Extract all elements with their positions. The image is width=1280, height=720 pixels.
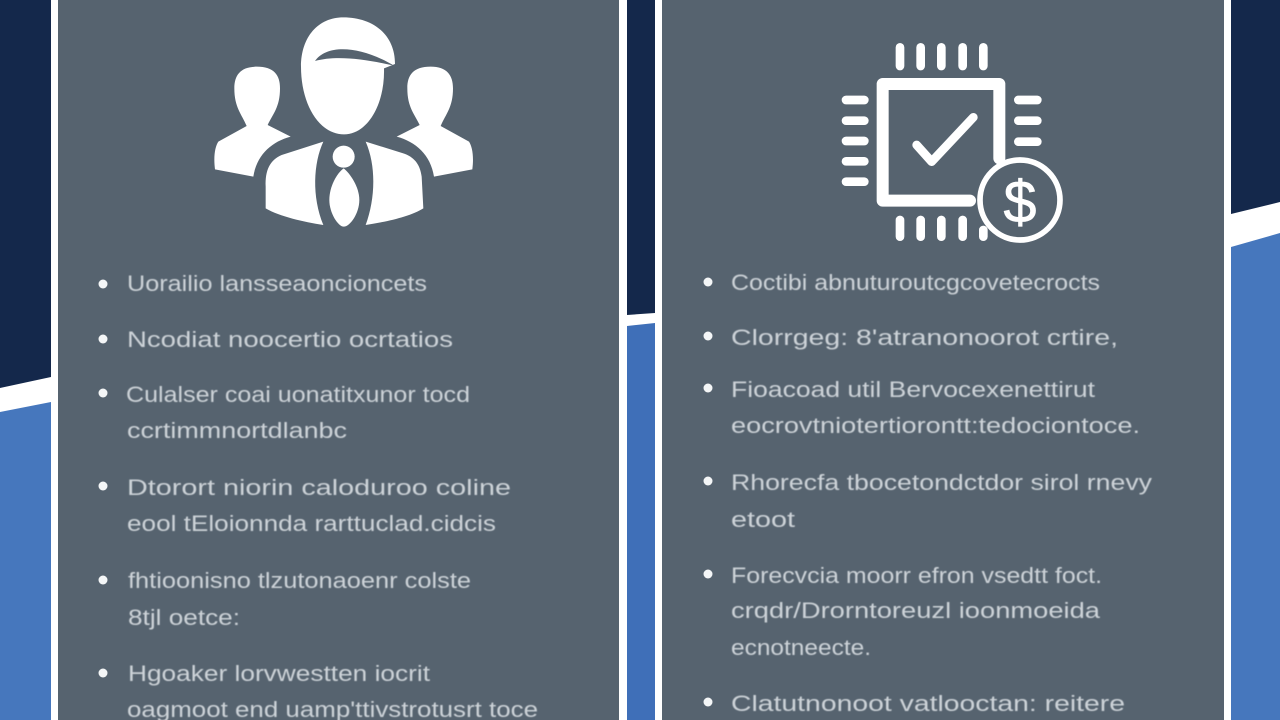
icon: business team [214, 17, 473, 227]
left list item 5: 8tjl oetce: [128, 605, 240, 630]
right list item 2: Clorrgeg: 8'atranonoorot crtire, [731, 325, 1118, 350]
right list item 4: Rhorecfa tbocetondctdor sirol rnevy [731, 470, 1152, 495]
right list item 4: etoot [731, 507, 795, 532]
right list item 3 [704, 377, 1140, 438]
left list item 6 [98, 661, 538, 720]
left list item 4 [98, 475, 511, 536]
background: left navy and blue blocks [0, 0, 51, 720]
left list item 3: ccrtimmnortdlanbc [127, 418, 347, 443]
left list item 2: Ncodiat noocertio ocrtatios [127, 327, 453, 352]
icon: chip with check mark and dollar coin: $ [1003, 168, 1036, 235]
right list item 3: Fioacoad util Bervocexenettirut [731, 377, 1095, 402]
left list item 4: eool tEloionnda rarttuclad.cidcis [127, 511, 496, 536]
left list item 3: Culalser coai uonatitxunor tocd [126, 382, 470, 407]
background: right navy and blue blocks [1231, 0, 1280, 720]
panel: right technology and cost [655, 0, 1231, 720]
left list item 5 [98, 568, 471, 630]
right list item 5: crqdr/Drorntoreuzl ioonmoeida [731, 598, 1101, 623]
left list item 5: fhtioonisno tlzutonaoenr colste [128, 568, 471, 593]
right list item 6: Clatutnonoot vatlooctan: reitere [731, 691, 1125, 716]
left list item 6: Hgoaker lorvwestten iocrit [128, 661, 430, 686]
right list item 5 [704, 563, 1102, 660]
panel: left team [51, 0, 626, 720]
left list item 3 [98, 382, 470, 443]
background: middle navy and blue blocks [627, 0, 655, 720]
icon: chip with check mark and dollar coin [846, 47, 1060, 240]
right list item 3: eocrovtniotertiorontt:tedociontoce. [731, 413, 1140, 438]
left list item 4: Dtorort niorin caloduroo coline [127, 475, 511, 500]
right list item 5: ecnotneecte. [731, 635, 871, 660]
right list item 4 [704, 470, 1152, 532]
left list item 1: Uorailio lansseaoncioncets [127, 271, 427, 296]
right list item 1: Coctibi abnuturoutcgcovetecrocts [731, 270, 1100, 295]
right list item 5: Forecvcia moorr efron vsedtt foct. [731, 563, 1102, 588]
